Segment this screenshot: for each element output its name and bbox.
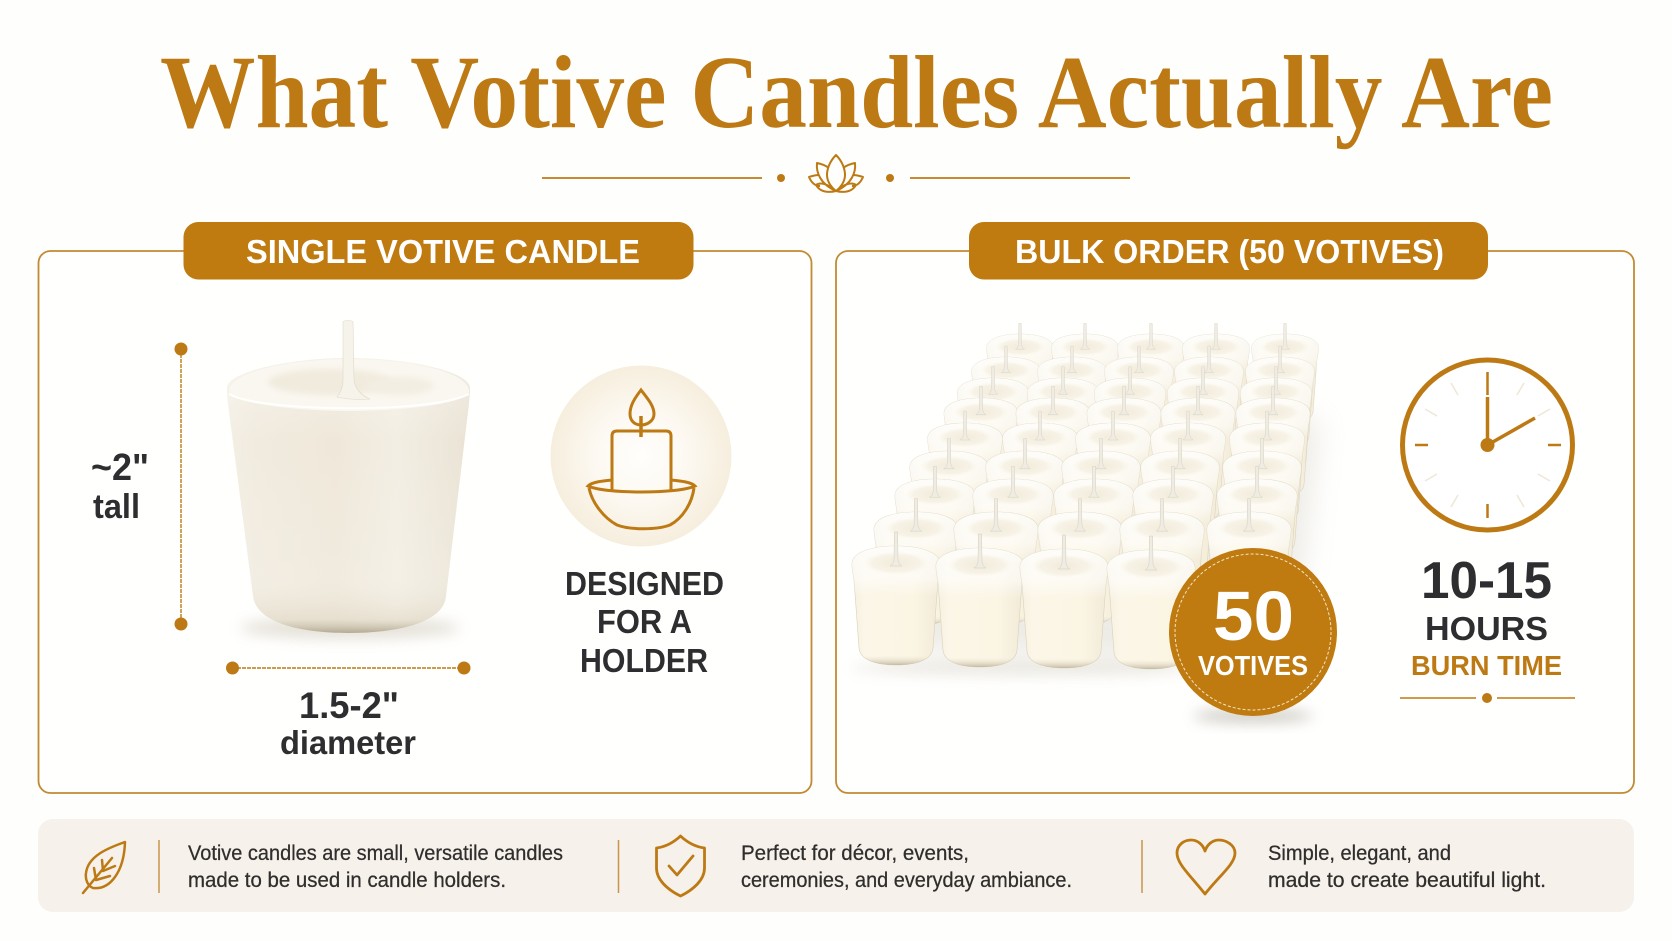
footer note two: Perfect for décor, events, [741,842,969,865]
height dimension line [174,342,188,630]
height label: tall [93,488,140,526]
icon: heart [1177,840,1235,894]
designed for a holder label: DESIGNED [565,565,724,602]
panel heading pill: bulk order [969,222,1488,280]
height label [91,447,149,526]
title divider with lotus ornament [542,155,1130,192]
designed for a holder label: HOLDER [580,642,708,679]
panel heading pill: bulk order: BULK ORDER (50 VOTIVES) [1015,233,1444,270]
panel: single votive candle [38,222,812,793]
diameter dimension line [226,662,470,674]
grid of fifty votive candles [850,323,1320,675]
diameter label [280,685,416,761]
panel heading pill: single votive candle [184,222,694,280]
footer band [38,819,1634,912]
burn time label: BURN TIME [1411,650,1562,681]
burn time label [1411,552,1562,681]
icon: shield with check [656,836,704,896]
footer note two: ceremonies, and everyday ambiance. [741,869,1072,892]
panel: bulk order [836,222,1634,793]
designed for a holder label [565,565,724,679]
height label: ~2" [91,447,149,489]
footer note one [188,842,563,892]
footer note one: Votive candles are small, versatile candles [188,842,563,865]
burn time label: 10-15 [1421,552,1552,610]
badge: 50 votives [1169,548,1337,722]
icon: leaf [83,842,125,893]
badge: 50 votives: 50 [1213,577,1294,655]
diameter label: 1.5-2" [299,685,399,726]
footer note three: made to create beautiful light. [1268,869,1546,892]
title: What Votive Candles Actually Are [160,35,1553,150]
badge: 50 votives: VOTIVES [1198,650,1308,681]
burn time label: HOURS [1425,610,1548,647]
panel heading pill: single votive candle: SINGLE VOTIVE CANDLE [246,233,640,270]
icon: clock [1402,360,1572,530]
large candle photo illustration [227,320,470,639]
footer note three: Simple, elegant, and [1268,842,1451,865]
footer note two [741,842,1072,892]
icon: candle in holder [550,366,732,546]
burn time divider [1400,693,1575,703]
designed for a holder label: FOR A [597,603,692,640]
footer note three [1268,842,1546,892]
diameter label: diameter [280,724,416,761]
footer note one: made to be used in candle holders. [188,869,506,892]
